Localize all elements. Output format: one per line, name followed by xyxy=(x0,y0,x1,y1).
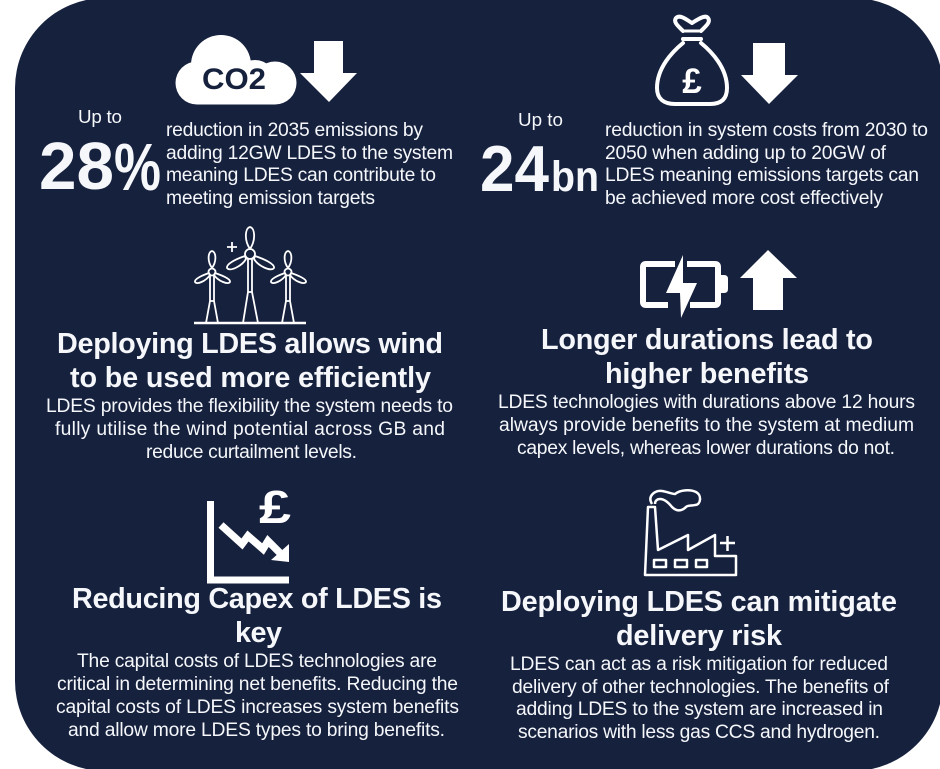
heading: durations xyxy=(541,324,873,390)
text: capex description: and allow more LDES types to bring benefits. xyxy=(68,720,445,741)
text: risk description: scenarios with less gas CCS and hydrogen. xyxy=(518,722,880,743)
section: longer durations xyxy=(498,250,915,459)
text: durations description xyxy=(498,392,915,459)
icon: up arrow xyxy=(740,250,797,310)
icon: wind turbines xyxy=(194,227,306,323)
icon: down arrow xyxy=(741,43,798,104)
heading: wind xyxy=(57,328,443,394)
text: wind description: reduce curtailment levels. xyxy=(146,442,357,463)
text: durations description: always provide benefits to the system at medium xyxy=(499,415,914,436)
heading: durations: higher benefits xyxy=(605,358,809,390)
text: capex description xyxy=(56,651,459,741)
section: system costs xyxy=(480,17,928,209)
text: costs description: reduction in system costs from 2030 to xyxy=(605,120,928,141)
text: risk description xyxy=(510,654,890,743)
icon: CO2 cloud: CO2 xyxy=(202,63,266,96)
text: emissions description: meaning LDES can contribute to xyxy=(166,165,436,186)
label: up to: Up to xyxy=(518,109,563,130)
text: risk description: LDES can act as a risk mitigation for reduced xyxy=(510,654,888,675)
text: wind description: LDES provides the flexibility the system needs to xyxy=(46,396,453,417)
stat: 28%: % xyxy=(114,130,161,205)
text: emissions description: reduction in 2035 emissions by xyxy=(166,120,423,141)
text: emissions description: meeting emission targets xyxy=(166,188,375,209)
stat: 28% xyxy=(39,129,161,205)
text: emissions description xyxy=(166,120,453,209)
icon: factory xyxy=(645,490,736,575)
text: costs description: be achieved more cost effectively xyxy=(605,188,883,209)
section: delivery risk xyxy=(501,490,897,743)
heading: risk xyxy=(501,586,897,652)
text: durations description: capex levels, whereas lower durations do not. xyxy=(517,438,895,459)
heading: capex: key xyxy=(235,617,282,649)
stat: 28%: 28 xyxy=(39,129,114,204)
icon: falling cost chart xyxy=(210,481,292,580)
text: capex description: The capital costs of LDES technologies are xyxy=(77,651,437,672)
heading: wind: Deploying LDES allows wind xyxy=(57,328,443,360)
label: up to: Up to xyxy=(78,106,122,127)
icon: CO2 cloud xyxy=(176,35,296,104)
text: risk description: delivery of other technologies. The benefits of xyxy=(512,677,890,698)
section: capex xyxy=(56,481,459,741)
text: costs description: 2050 when adding up to 20GW of xyxy=(605,143,887,164)
text: capex description: critical in determining net benefits. Reducing the xyxy=(57,674,458,695)
icon: down arrow xyxy=(300,41,357,102)
stat: 24bn: bn xyxy=(551,153,599,201)
icon: money bag xyxy=(657,17,727,104)
stat: 24bn xyxy=(480,132,599,205)
text: capex description: capital costs of LDES increases system benefits xyxy=(56,697,459,718)
text: risk description: adding LDES to the system are increased in xyxy=(516,699,883,720)
section: wind efficiency xyxy=(46,227,453,463)
text: durations description: LDES technologies with durations above 12 hours xyxy=(498,392,915,413)
section: emissions reduction xyxy=(39,35,453,209)
text: wind description: fully utilise the wind potential across GB and xyxy=(55,419,445,440)
heading: wind: to be used more efficiently xyxy=(70,362,431,394)
icon: falling cost chart: £ xyxy=(259,481,292,533)
heading: risk: Deploying LDES can mitigate xyxy=(501,586,897,618)
heading: durations: Longer durations lead to xyxy=(541,324,873,356)
text: costs description: LDES meaning emissions targets can xyxy=(605,165,919,186)
stat: 24bn: 24 xyxy=(480,132,549,205)
heading: capex xyxy=(72,583,442,649)
heading: capex: Reducing Capex of LDES is xyxy=(72,583,442,615)
heading: risk: delivery risk xyxy=(616,620,783,652)
icon: battery xyxy=(643,255,728,318)
icon: money bag: £ xyxy=(682,62,702,101)
text: emissions description: adding 12GW LDES to the system xyxy=(166,143,453,164)
text: wind description xyxy=(46,396,453,463)
text: costs description xyxy=(605,120,928,209)
